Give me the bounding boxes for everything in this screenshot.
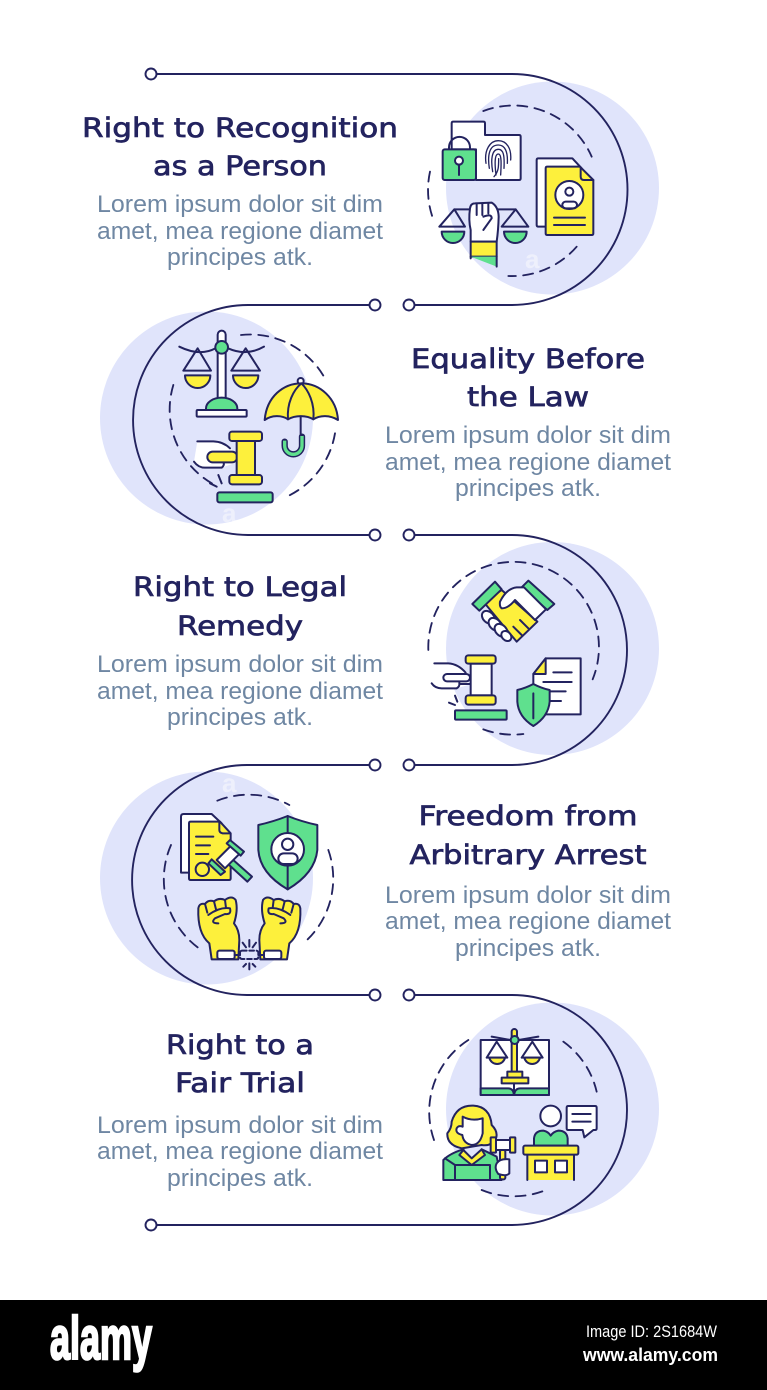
body text: principes atk. (455, 935, 601, 962)
body text: amet, mea regione diamet (97, 1138, 383, 1165)
heading (166, 1030, 314, 1099)
connector line (146, 990, 627, 1230)
body text: principes atk. (167, 1165, 313, 1192)
body text: Lorem ipsum dolor sit dim (385, 422, 671, 449)
body text (385, 422, 671, 502)
background circle (446, 542, 659, 755)
body text: amet, mea regione diamet (385, 908, 671, 935)
heading: Freedom from (418, 801, 638, 832)
background circle (100, 312, 313, 524)
icon: law book, judge and witness (429, 1029, 597, 1196)
heading: Right to Legal (133, 572, 347, 603)
panel: equality before the law (100, 300, 671, 540)
heading (133, 572, 347, 642)
heading: Arbitrary Arrest (410, 840, 646, 871)
heading: Equality Before (411, 344, 645, 375)
heading: Right to Recognition (82, 113, 398, 144)
watermark: a (222, 498, 237, 528)
body text: amet, mea regione diamet (97, 218, 383, 245)
body text: Lorem ipsum dolor sit dim (385, 882, 671, 909)
body text: Lorem ipsum dolor sit dim (97, 651, 383, 678)
heading (410, 801, 646, 871)
watermark: a (525, 244, 540, 274)
heading: Remedy (177, 611, 303, 642)
body text (97, 191, 383, 271)
icon: identity, fingerprint, scales and fist (428, 105, 593, 276)
background circle (100, 772, 313, 984)
heading: the Law (467, 382, 589, 413)
watermark: a (222, 768, 237, 798)
heading (411, 344, 645, 413)
connector line (146, 68, 628, 310)
connector line (132, 760, 380, 1000)
body text: principes atk. (167, 704, 313, 731)
icon: handshake, gavel, shield and document (428, 562, 599, 735)
panel: right to a fair trial (97, 990, 659, 1230)
body text: principes atk. (167, 244, 313, 271)
icon: verdict document, shield and broken chains (164, 795, 333, 969)
image id: Image ID: 2S1684W (586, 1322, 717, 1341)
heading: Right to a (166, 1030, 314, 1061)
body text: amet, mea regione diamet (97, 678, 383, 705)
body text (385, 882, 671, 962)
background circle (446, 1002, 659, 1216)
connector line (133, 300, 380, 540)
background circle (446, 82, 659, 294)
icon: scales, umbrella and gavel (170, 331, 338, 502)
panel: freedom from arbitrary arrest (100, 760, 671, 1000)
body text: amet, mea regione diamet (385, 449, 671, 476)
body text (97, 1112, 383, 1192)
body text: Lorem ipsum dolor sit dim (97, 1112, 383, 1139)
panel: right to legal remedy (97, 530, 659, 770)
body text: Lorem ipsum dolor sit dim (97, 191, 383, 218)
heading: as a Person (153, 151, 327, 182)
footer bar (0, 1300, 767, 1390)
body text (97, 651, 383, 731)
heading (82, 113, 398, 182)
heading: Fair Trial (175, 1068, 305, 1099)
connector line (404, 530, 627, 770)
panel: right to recognition as a person (82, 68, 659, 310)
website: www.alamy.com (582, 1345, 718, 1365)
body text: principes atk. (455, 475, 601, 502)
alamy logo: alamy (50, 1305, 152, 1372)
